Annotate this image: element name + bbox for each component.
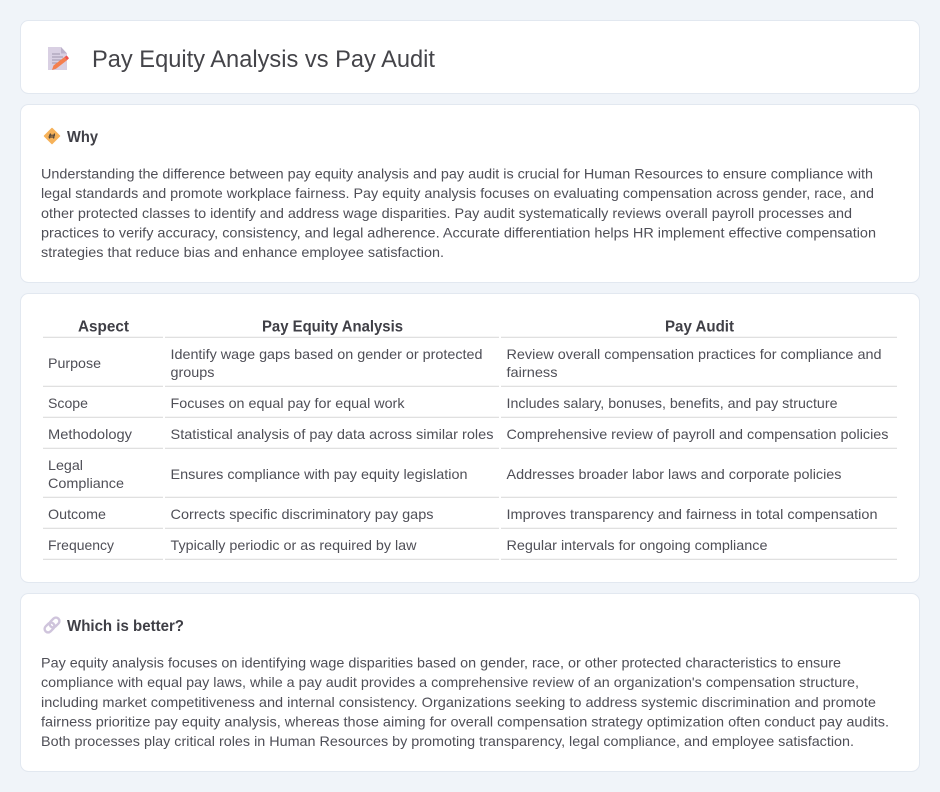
table header row: Pay Equity Analysis xyxy=(262,318,403,336)
row: legal compliance: Addresses broader labor laws and corporate policies xyxy=(506,466,842,482)
icon: memo with pencil xyxy=(48,47,69,70)
row: outcome: Corrects specific discriminatory pay gaps xyxy=(170,506,434,522)
which is better paragraph: Both processes play critical roles in Human Resources by promoting transparency, legal compliance, and employee satisfaction. xyxy=(41,733,854,749)
row: methodology: Comprehensive review of payroll and compensation policies xyxy=(506,426,888,442)
row: scope: Includes salary, bonuses, benefits, and pay structure xyxy=(506,395,838,411)
row: outcome xyxy=(43,506,897,528)
row: purpose: Purpose xyxy=(48,355,101,371)
row: methodology: Methodology xyxy=(48,426,132,442)
why paragraph: practices to verify accuracy, consistency, and legal adherence. Accurate differentiation helps HR implement effective compensation xyxy=(41,224,876,240)
title: Pay Equity Analysis vs Pay Audit xyxy=(92,46,435,73)
table header row xyxy=(43,318,897,337)
row: purpose: Review overall compensation practices for compliance and xyxy=(506,346,882,362)
which is better paragraph: including market competitiveness and internal consistency. Organizations seeking to address systemic discrimination and promote xyxy=(41,694,876,710)
row: scope xyxy=(43,395,897,417)
row: frequency xyxy=(43,537,897,559)
panel: why xyxy=(20,104,920,282)
row: purpose: Identify wage gaps based on gender or protected xyxy=(170,346,482,362)
heading: which is better: Which is better? xyxy=(67,618,184,635)
why paragraph: other protected classes to identify and address wage disparities. Pay audit systematically reviews overall payroll processes and xyxy=(41,205,852,221)
row: legal compliance: Ensures compliance with pay equity legislation xyxy=(170,466,468,482)
row: scope: Scope xyxy=(48,395,88,411)
row: outcome: Improves transparency and fairness in total compensation xyxy=(506,506,878,522)
why paragraph: Understanding the difference between pay equity analysis and pay audit is crucial for Human Resources to ensure compliance with xyxy=(41,166,873,182)
row: scope: Focuses on equal pay for equal work xyxy=(170,395,406,411)
row: legal compliance xyxy=(43,457,897,497)
table header row: Pay Audit xyxy=(665,318,735,336)
row: outcome: Outcome xyxy=(48,506,106,522)
why paragraph xyxy=(41,166,876,260)
row: frequency: Frequency xyxy=(48,537,114,553)
panel: title header xyxy=(20,20,920,94)
panel: which is better xyxy=(20,594,920,772)
which is better paragraph: compliance with equal pay laws, while a pay audit provides a comprehensive review of an organization's compensation structure, xyxy=(41,674,859,690)
row: purpose: groups xyxy=(170,364,214,380)
row: frequency: Typically periodic or as required by law xyxy=(170,537,417,553)
row: legal compliance: Legal xyxy=(48,457,83,473)
which is better paragraph: fairness prioritize pay equity analysis, whereas those aiming for overall compensation strategy optimization often conduct pay audits. xyxy=(41,714,889,730)
which is better paragraph: Pay equity analysis focuses on identifying wage disparities based on gender, race, or other protected characteristics to ensure xyxy=(41,654,841,670)
heading: why: Why xyxy=(67,129,98,146)
why paragraph: strategies that reduce bias and enhance employee satisfaction. xyxy=(41,244,444,260)
row: legal compliance: Compliance xyxy=(48,475,124,491)
row: frequency: Regular intervals for ongoing compliance xyxy=(506,537,768,553)
panel: comparison table xyxy=(20,294,920,582)
row: purpose xyxy=(43,346,897,386)
why paragraph: legal standards and promote workplace fairness. Pay equity analysis focuses on evaluating compensation across gender, race, and xyxy=(41,185,874,201)
row: methodology xyxy=(43,426,897,448)
which is better paragraph xyxy=(41,654,889,749)
row: purpose: fairness xyxy=(506,364,558,380)
table header row: Aspect xyxy=(78,318,130,336)
icon: link xyxy=(43,616,61,634)
row: methodology: Statistical analysis of pay data across similar roles xyxy=(170,426,494,442)
icon: warning diamond xyxy=(44,128,60,144)
